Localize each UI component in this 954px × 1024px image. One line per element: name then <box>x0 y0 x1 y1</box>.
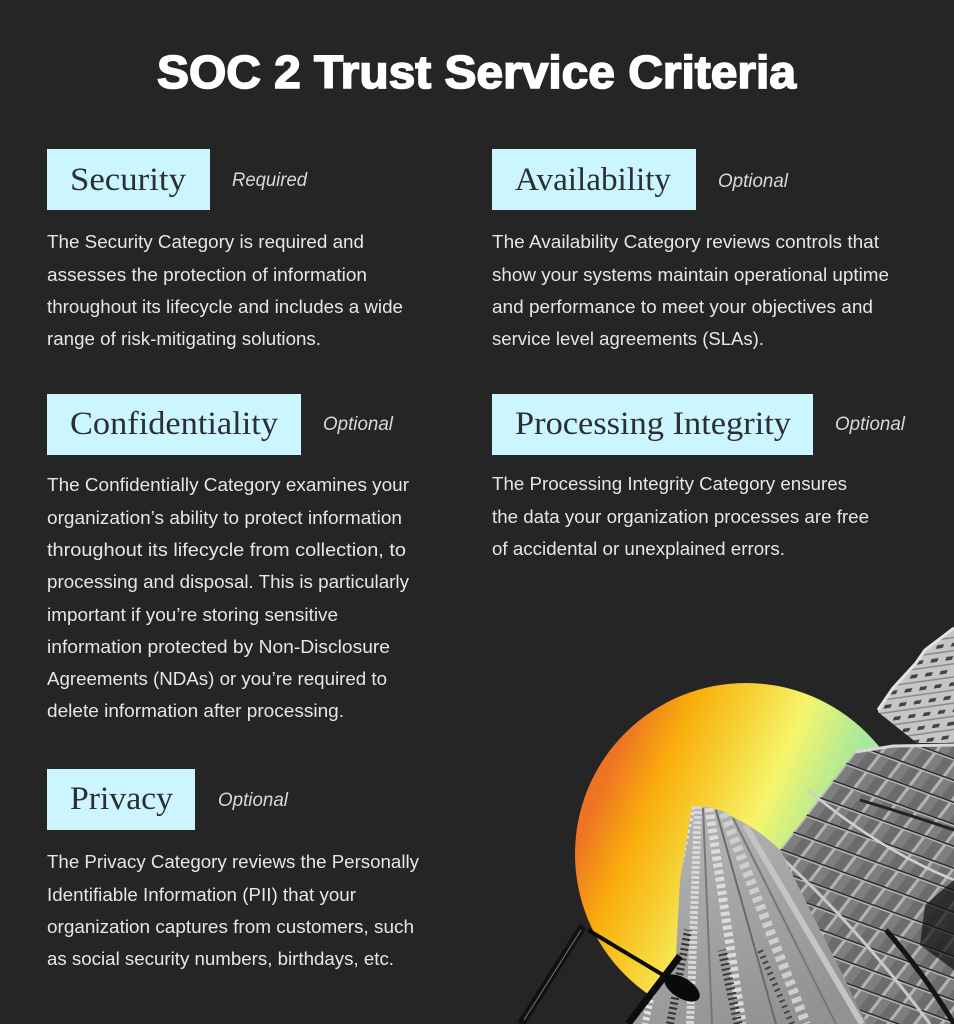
confidentiality heading box <box>47 394 301 455</box>
availability description: and performance to meet your objectives and <box>492 297 873 317</box>
processing integrity heading box <box>492 394 813 455</box>
privacy description: The Privacy Category reviews the Personally <box>47 852 419 872</box>
availability heading box <box>492 149 696 210</box>
processing integrity description: of accidental or unexplained errors. <box>492 539 785 559</box>
privacy tag: Optional <box>218 790 289 811</box>
building: top right <box>878 628 954 743</box>
availability description: service level agreements (SLAs). <box>492 329 764 349</box>
privacy heading box <box>47 769 195 830</box>
confidentiality description: throughout its lifecycle from collection, to <box>47 540 406 560</box>
processing integrity heading box: Processing Integrity <box>515 406 792 442</box>
confidentiality description: delete information after processing. <box>47 701 344 721</box>
privacy description: as social security numbers, birthdays, etc. <box>47 949 394 969</box>
confidentiality heading box: Confidentiality <box>70 406 279 442</box>
privacy description: Identifiable Information (PII) that your <box>47 885 356 905</box>
street lamp <box>521 926 704 1024</box>
gradient circle <box>575 683 917 1024</box>
security description: throughout its lifecycle and includes a wide <box>47 297 403 317</box>
security description <box>47 232 403 349</box>
illustration: gradient sun and buildings <box>521 628 954 1024</box>
processing integrity description <box>492 474 869 559</box>
availability heading box: Availability <box>515 162 672 198</box>
panel: processing integrity <box>492 394 906 559</box>
availability tag: Optional <box>718 171 789 192</box>
privacy heading box: Privacy <box>70 781 174 817</box>
confidentiality tag: Optional <box>323 414 394 435</box>
title: SOC 2 Trust Service Criteria <box>157 46 796 98</box>
panel: privacy <box>47 769 419 969</box>
processing integrity description: The Processing Integrity Category ensures <box>492 474 847 494</box>
confidentiality description: important if you’re storing sensitive <box>47 605 338 625</box>
panel: confidentiality <box>47 394 409 721</box>
availability description <box>492 232 889 349</box>
security heading box <box>47 149 210 210</box>
confidentiality description: The Confidentially Category examines your <box>47 475 409 495</box>
security description: assesses the protection of information <box>47 265 367 285</box>
security description: The Security Category is required and <box>47 232 364 252</box>
processing integrity description: the data your organization processes are free <box>492 507 869 527</box>
building: right glass block <box>780 745 954 1024</box>
security heading box: Security <box>70 162 187 198</box>
privacy description <box>47 852 419 969</box>
confidentiality description: information protected by Non-Disclosure <box>47 637 390 657</box>
confidentiality description <box>47 475 409 721</box>
panel: security <box>47 149 403 349</box>
availability description: show your systems maintain operational uptime <box>492 265 889 285</box>
building: central tower <box>627 806 867 1024</box>
availability description: The Availability Category reviews controls that <box>492 232 879 252</box>
processing integrity tag: Optional <box>835 414 906 435</box>
security tag: Required <box>232 170 308 191</box>
confidentiality description: organization’s ability to protect information <box>47 508 402 528</box>
security description: range of risk-mitigating solutions. <box>47 329 321 349</box>
confidentiality description: Agreements (NDAs) or you’re required to <box>47 669 387 689</box>
confidentiality description: processing and disposal. This is particularly <box>47 572 409 592</box>
panel: availability <box>492 149 889 349</box>
privacy description: organization captures from customers, such <box>47 917 414 937</box>
